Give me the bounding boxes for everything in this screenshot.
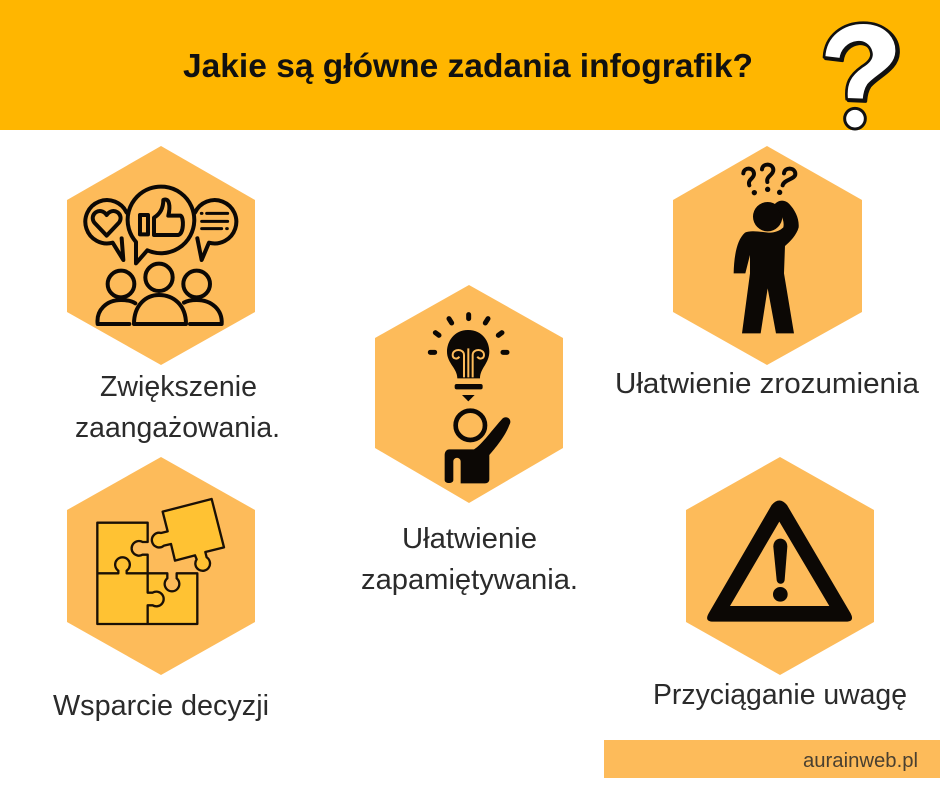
panel: attracting attention [653,457,907,711]
label: memorising [361,523,578,596]
icon: confused person [734,165,799,333]
panel: engagement [67,146,280,444]
panel: understanding [615,146,919,400]
hexagon: engagement [67,146,255,365]
icon: puzzle [97,499,224,624]
label: attention: Przyciąganie uwagę [653,679,907,711]
hexagon: understanding [673,146,862,365]
panel: decision support [53,457,269,722]
label: memorising: Ułatwienie [402,523,537,555]
label: engagement: zaangażowania. [75,412,280,444]
icon: people with speech bubbles [85,187,236,324]
hexagon: decisions [67,457,255,675]
panel: memorising [361,285,578,596]
label: memorising: zapamiętywania. [361,564,578,596]
label: engagement: Zwiększenie [100,371,257,403]
icon: light bulb and person [430,315,510,483]
label: decisions: Wsparcie decyzji [53,690,269,722]
footer bar [604,740,940,778]
icon: question mark [824,23,898,129]
hexagon: memorising [375,285,563,503]
title: Jakie są główne zadania infografik? [183,47,753,84]
label: engagement [75,371,280,444]
header band [0,0,940,130]
hexagon: attention [686,457,874,675]
footer url: aurainweb.pl [803,750,918,772]
icon: warning triangle [707,500,852,622]
label: understanding: Ułatwienie zrozumienia [615,368,919,400]
